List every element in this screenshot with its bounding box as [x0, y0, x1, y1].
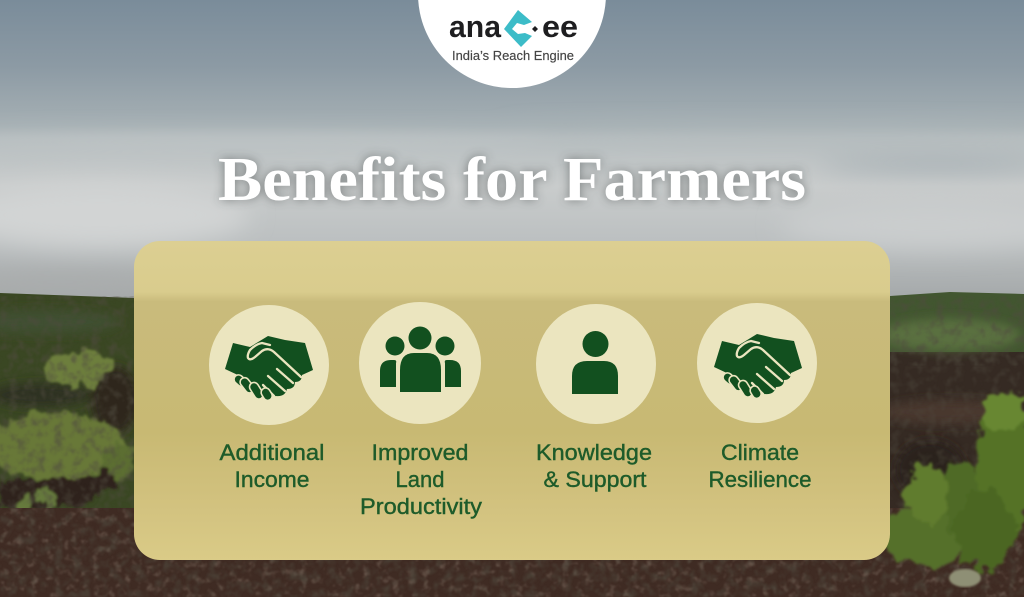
label: Climate Resilience: [708, 440, 812, 492]
benefit: Knowledge & Support: [536, 304, 656, 492]
benefit: Additional Income: [209, 305, 329, 492]
label: Climate Resilience: Climate: [721, 440, 799, 465]
title: Benefits for Farmers: [218, 146, 806, 214]
panel: benefits card: [134, 241, 890, 560]
logo wordmark: ee: [542, 9, 578, 44]
label: Additional Income: Income: [234, 467, 310, 492]
icon circle: group of people: [359, 302, 481, 424]
icon circle: handshake: [209, 305, 329, 425]
icon circle: handshake: [697, 303, 817, 423]
forest slopes: [0, 293, 134, 520]
benefit: Climate Resilience: [697, 303, 817, 492]
rocky ground: [0, 508, 1024, 597]
logo badge: [418, 0, 606, 88]
logo wordmark: [449, 9, 578, 44]
title: Benefits for Farmers: [218, 146, 806, 214]
logo wordmark: ana: [449, 9, 502, 44]
benefit: Improved Land Productivity: [359, 302, 482, 519]
icon circle: person: [536, 304, 656, 424]
logo tagline: India’s Reach Engine: [452, 48, 574, 63]
label: Improved Land Productivity: Improved: [372, 440, 468, 465]
pine trees: [879, 388, 1024, 570]
label: Improved Land Productivity: [360, 440, 482, 519]
label: Knowledge & Support: Knowledge: [536, 440, 652, 465]
label: Knowledge & Support: [536, 440, 652, 492]
label: Additional Income: [220, 440, 324, 492]
label: Improved Land Productivity: Productivity: [360, 494, 482, 519]
label: Additional Income: Additional: [220, 440, 324, 465]
label: Climate Resilience: Resilience: [708, 467, 812, 492]
logo mark: [504, 10, 538, 47]
label: Knowledge & Support: & Support: [544, 467, 646, 492]
label: Improved Land Productivity: Land: [396, 467, 444, 492]
